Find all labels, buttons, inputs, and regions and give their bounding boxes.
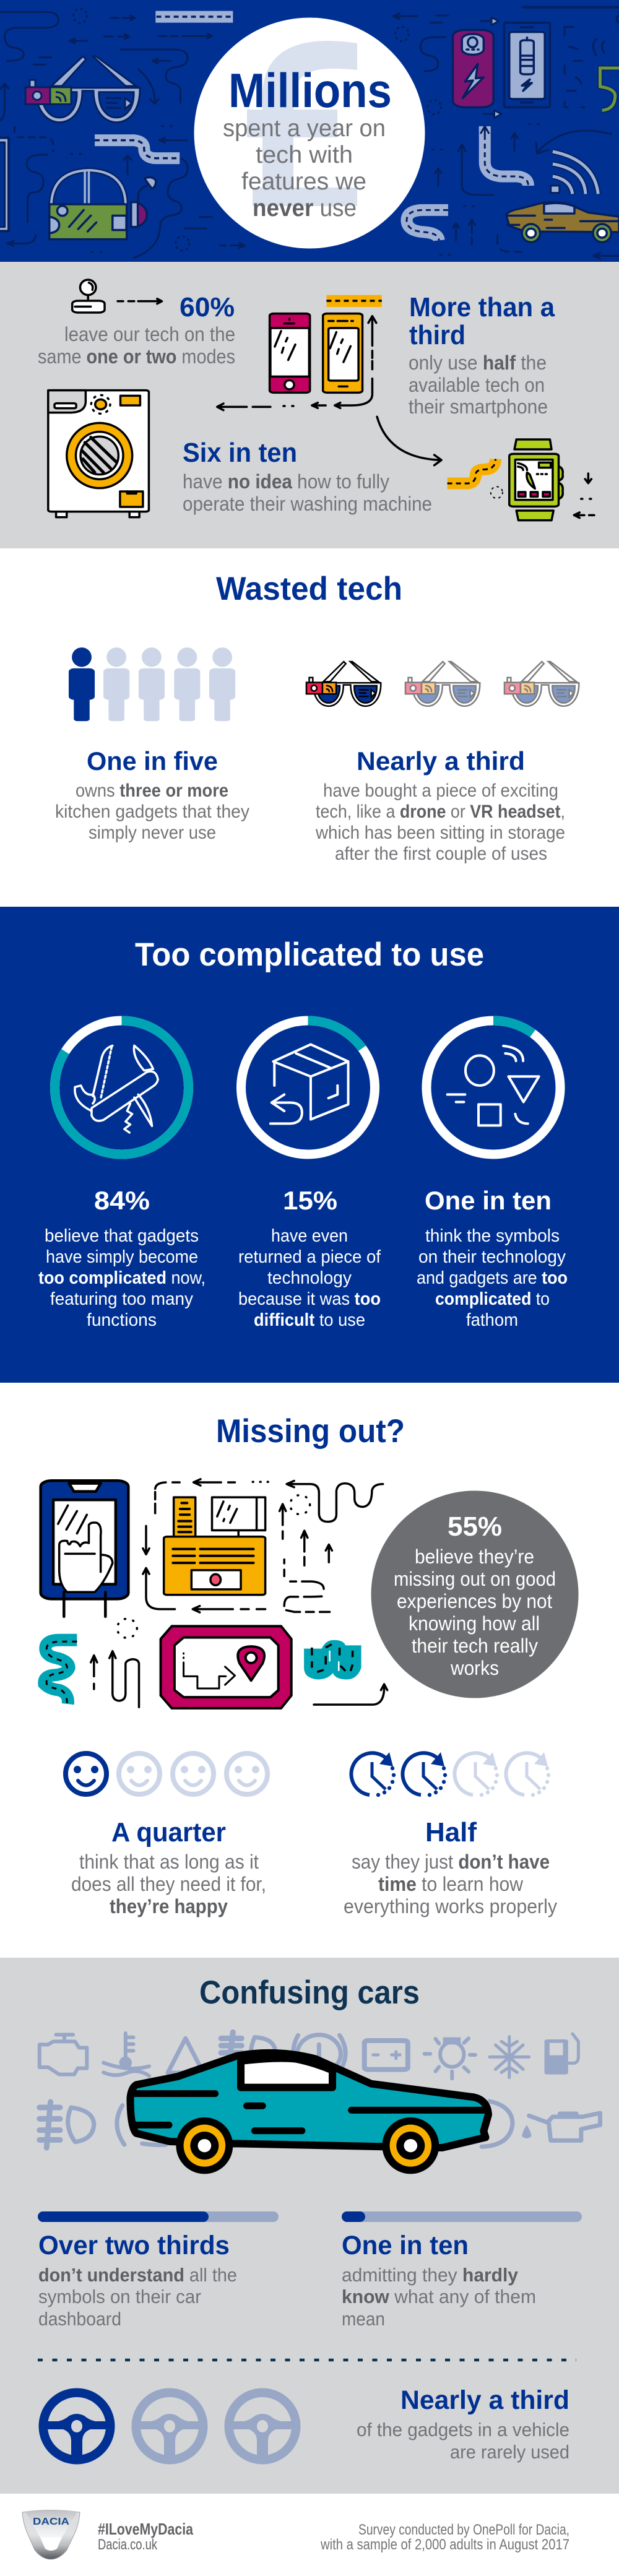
text: kitchen gadgets: owns three or more	[76, 780, 228, 801]
arrows: near watch	[574, 473, 594, 518]
arrow: curve to watch	[377, 417, 441, 465]
text: survey note: Survey conducted by OnePoll for Dacia,	[358, 2522, 569, 2538]
text: returned: technology	[267, 1268, 352, 1288]
text: half	[409, 352, 548, 418]
icon: five people	[69, 647, 235, 721]
panel: footer	[0, 2494, 619, 2576]
arrows: lower left	[91, 1651, 139, 1707]
text: returned: difficult to use	[254, 1310, 365, 1330]
windscreen gadget	[50, 170, 156, 240]
text: survey note: with a sample of 2,000 adults in August 2017	[320, 2536, 569, 2553]
stat: 15%	[238, 1186, 381, 1330]
text: spent a year: never use	[253, 195, 357, 222]
text: drone or VR: have bought a piece of exciting	[323, 780, 558, 801]
heading: confusing cars: Confusing cars	[199, 1974, 420, 2011]
text: too complicated now: have simply become	[46, 1247, 198, 1267]
text: kitchen gadgets: kitchen gadgets that they	[55, 802, 249, 822]
charging phone	[504, 23, 550, 107]
logo: dacia badge	[22, 2510, 80, 2559]
text: too complicated now: functions	[87, 1310, 157, 1330]
text: drone or VR: tech, like a drone or VR headset,	[316, 802, 565, 822]
text: too complicated now: believe that gadgets	[45, 1226, 199, 1246]
power bank	[453, 30, 493, 107]
text: hardly know: know what any of them	[342, 2286, 536, 2307]
text: no time: say they just don’t have	[352, 1851, 550, 1873]
logo: dacia badge: DACIA	[33, 2517, 70, 2527]
text: happy: they’re happy	[110, 1895, 228, 1917]
text: drone or VR: which has been sitting in storage	[315, 823, 565, 843]
panel: usage icons	[48, 280, 594, 521]
text: half: available tech on	[409, 374, 545, 396]
text: hashtag: #ILoveMyDacia	[98, 2520, 193, 2538]
text: rarely used	[357, 2419, 569, 2463]
text: modes: leave our tech on the	[64, 323, 235, 345]
text: symbols: and gadgets are too	[417, 1268, 568, 1288]
road: amber winding	[448, 459, 495, 483]
text: missing out: missing out on good	[394, 1568, 556, 1590]
arrow: to circle	[314, 1684, 387, 1705]
heading: too complicated: Too complicated to use	[135, 936, 484, 973]
stat: half: Half	[425, 1817, 477, 1848]
stat: 84%: 84%	[94, 1186, 150, 1215]
text: no time: time to learn how	[378, 1873, 524, 1895]
heading: missing out: Missing out?	[216, 1413, 405, 1450]
left squiggles and arrows	[0, 9, 245, 258]
stat: one in ten car	[342, 2231, 536, 2330]
icon: washing machine	[48, 391, 149, 517]
icon: smart glasses header	[25, 56, 140, 123]
text: happy: does all they need it for,	[71, 1873, 266, 1895]
icon: smartwatch	[509, 439, 563, 521]
callout: millions circle	[194, 17, 425, 249]
heading: millions: Millions	[228, 63, 392, 118]
text: returned: because it was too	[238, 1289, 381, 1309]
text: modes	[38, 323, 235, 368]
panel: dashboard symbols and car	[40, 2032, 600, 2174]
chart: bar one in ten	[342, 2211, 582, 2222]
icon: pound sign watermark	[247, 41, 357, 206]
stat: more than a third	[409, 292, 555, 418]
text: half: their smartphone	[409, 395, 548, 418]
text: kitchen gadgets	[55, 780, 249, 843]
text: symbols: think the symbols	[425, 1226, 560, 1246]
text: missing out: works	[450, 1657, 499, 1679]
green number gadget	[600, 68, 619, 110]
stat: a quarter: A quarter	[111, 1817, 226, 1848]
dots: watch ring	[491, 486, 503, 498]
stat: more than a third: More than a	[409, 292, 555, 322]
icon: desktop console	[164, 1497, 266, 1595]
text: don't understand	[38, 2264, 237, 2330]
stat: 60%: 60%	[180, 292, 235, 322]
text: modes: same one or two modes	[38, 345, 235, 368]
road tracks	[95, 11, 528, 240]
text: survey note	[320, 2522, 569, 2553]
text: washing machine: operate their washing machine	[183, 493, 432, 515]
text: missing out: their tech really	[412, 1635, 538, 1657]
text: rarely used: of the gadgets in a vehicle	[357, 2419, 569, 2440]
road: teal left	[44, 1640, 77, 1704]
stat: six in ten	[183, 438, 432, 515]
arrow: joystick arrow	[118, 299, 162, 304]
text: returned: returned a piece of	[238, 1247, 381, 1267]
icon: three glasses	[306, 662, 579, 706]
section: header background	[0, 0, 619, 262]
icon: four smileys	[66, 1753, 267, 1794]
section: wasted tech background	[0, 548, 619, 907]
icon: return box	[271, 1044, 348, 1123]
stat: one in five: One in five	[87, 746, 218, 776]
callout: 55 percent: 55%	[448, 1511, 502, 1542]
text: symbols: complicated to	[435, 1289, 550, 1309]
stat: nearly a third gadgets	[357, 2385, 569, 2463]
section: missing out background	[0, 1383, 619, 1958]
stat: one in ten car: One in ten	[342, 2231, 469, 2260]
section: confusing cars background	[0, 1958, 619, 2494]
stat: one in five	[55, 746, 249, 843]
arrow: phone loop	[217, 316, 376, 410]
icon: three steering wheels	[38, 2388, 300, 2465]
text: too complicated now	[38, 1226, 206, 1330]
stat: more than a third: third	[409, 320, 465, 350]
text: symbols: fathom	[466, 1310, 518, 1330]
stat: over two thirds	[38, 2231, 237, 2330]
chart: bar two thirds	[38, 2211, 279, 2222]
icon: joystick	[72, 280, 105, 313]
text: washing machine: have no idea how to fully	[183, 470, 389, 493]
dots	[284, 405, 297, 407]
text: drone or VR: after the first couple of uses	[335, 844, 547, 864]
icon: swiss knife	[75, 1045, 158, 1133]
text: no time	[344, 1851, 557, 1917]
chart: ring 84 percent	[54, 1021, 188, 1154]
road: teal right	[304, 1640, 361, 1679]
road: amber top	[326, 295, 382, 307]
stat: 84%	[38, 1186, 206, 1330]
text: symbols	[417, 1226, 568, 1330]
text: spent a year	[223, 115, 386, 222]
stat: half	[344, 1817, 557, 1917]
stat: six in ten: Six in ten	[183, 438, 297, 468]
chart: ring 10 percent	[426, 1021, 560, 1154]
arrows: console loop	[143, 1479, 383, 1612]
text: hardly know: mean	[342, 2308, 385, 2330]
icon: symbols	[448, 1046, 539, 1125]
text: missing out	[394, 1545, 556, 1679]
text: no time: everything works properly	[344, 1895, 557, 1917]
stat: one in ten symbols: One in ten	[425, 1186, 552, 1215]
text: don't understand: dashboard	[38, 2308, 121, 2330]
text: missing out: believe they’re	[415, 1545, 534, 1568]
text: hardly know: admitting they hardly	[342, 2264, 519, 2286]
icons: ring symbols	[75, 1044, 539, 1133]
stat: a quarter	[71, 1817, 266, 1917]
stat: one in ten symbols	[417, 1186, 568, 1330]
icon: touch phone	[41, 1480, 128, 1617]
stat: nearly a third	[315, 746, 565, 864]
text: washing machine	[183, 470, 432, 515]
text: don't understand: symbols on their car	[38, 2286, 201, 2307]
stat: nearly a third gadgets: Nearly a third	[400, 2385, 569, 2415]
stat: nearly a third: Nearly a third	[357, 746, 525, 776]
text: too complicated now: featuring too many	[50, 1289, 193, 1309]
icon: amber phone	[323, 314, 363, 392]
text: spent a year: tech with	[256, 142, 353, 168]
text: returned: have even	[271, 1226, 348, 1246]
text: symbols: on their technology	[418, 1247, 566, 1267]
stat: 15%: 15%	[283, 1186, 337, 1215]
icons: dashboard warning lights	[40, 2032, 600, 2148]
icon: sat nav	[161, 1626, 292, 1708]
text: kitchen gadgets: simply never use	[89, 823, 216, 843]
text: don't understand: don’t understand all the	[38, 2264, 237, 2286]
icon: teal car	[130, 2053, 488, 2174]
panel: header line art	[0, 7, 619, 259]
text: spent a year: features we	[241, 168, 366, 195]
text: half: only use half the	[409, 352, 547, 374]
text: missing out: experiences by not	[397, 1590, 552, 1612]
text: missing out: knowing how all	[409, 1612, 540, 1635]
text: happy	[71, 1851, 266, 1917]
chart: ring 15 percent	[241, 1021, 375, 1154]
callout: 55 percent	[371, 1490, 578, 1698]
icon: magenta phone	[270, 314, 310, 392]
icon: four clocks	[351, 1752, 550, 1797]
text: too complicated now: too complicated now,	[38, 1268, 206, 1288]
text: hashtag: Dacia.co.uk	[98, 2536, 158, 2553]
heading: wasted tech: Wasted tech	[216, 571, 402, 607]
right arrows and squiggles	[393, 7, 619, 259]
gold car	[506, 202, 619, 242]
text: happy: think that as long as it	[79, 1851, 259, 1873]
dots: near watch	[581, 498, 594, 500]
wifi arcs	[551, 152, 598, 194]
stat: over two thirds: Over two thirds	[38, 2231, 230, 2260]
section: usage background	[0, 262, 619, 548]
section: too complicated background	[0, 907, 619, 1383]
dots: circles	[117, 1482, 310, 1638]
text: rarely used: are rarely used	[450, 2441, 569, 2463]
left device edge	[0, 138, 9, 231]
text: drone or VR	[315, 780, 565, 864]
text: spent a year: spent a year on	[223, 115, 386, 142]
text: hardly know	[342, 2264, 536, 2330]
stat: 60%	[38, 292, 235, 368]
text: hashtag	[98, 2520, 193, 2553]
text: returned	[238, 1226, 381, 1330]
panel: missing out icons	[41, 1479, 387, 1708]
